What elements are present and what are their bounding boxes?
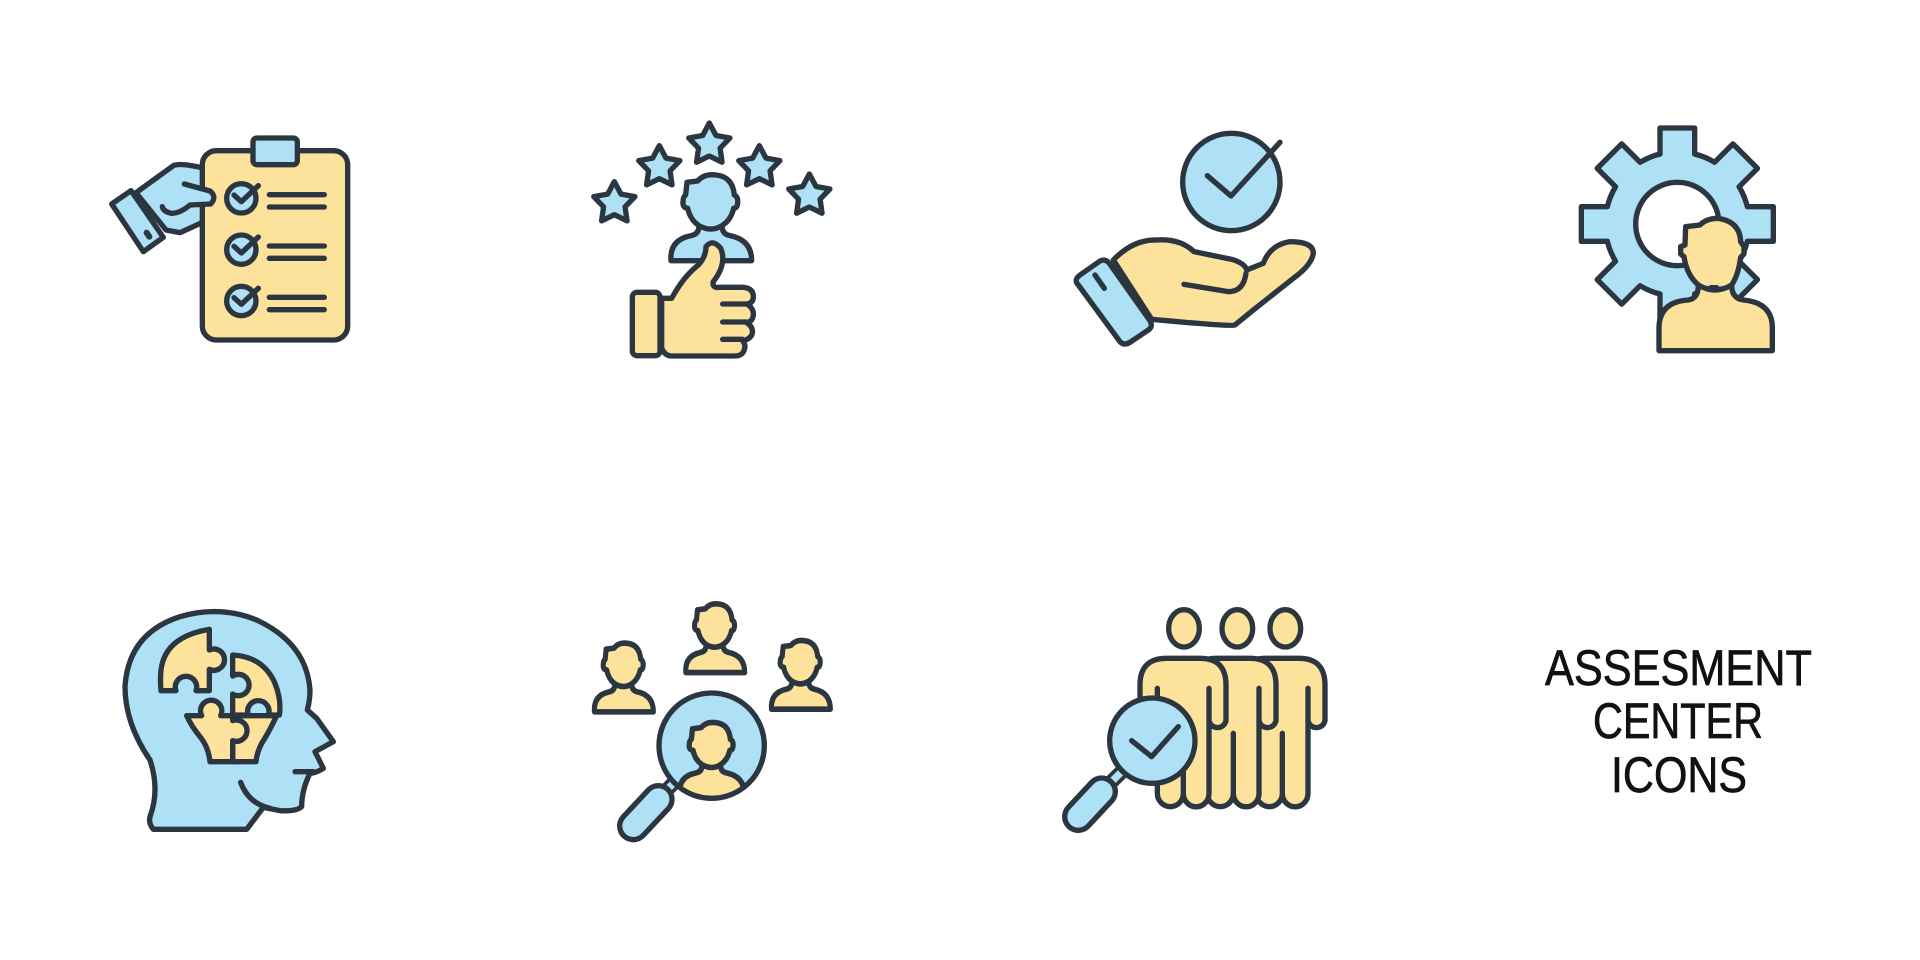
check mark bbox=[1132, 727, 1178, 757]
clipboard clip bbox=[253, 138, 297, 165]
person bbox=[1659, 218, 1772, 351]
magnifier lens bbox=[1110, 698, 1195, 783]
lens ring bbox=[659, 693, 764, 798]
clipboard board bbox=[202, 151, 348, 340]
check mark bbox=[1207, 142, 1280, 196]
cuff button bbox=[147, 233, 149, 237]
right figure bbox=[1239, 658, 1325, 807]
left figure bbox=[1140, 658, 1226, 807]
middle figure bbox=[1190, 658, 1276, 807]
cuff button bbox=[1095, 275, 1104, 288]
title line 2: CENTER bbox=[1593, 693, 1763, 749]
icon: open hand with check mark bbox=[1076, 133, 1313, 344]
icon: hand holding checklist clipboard bbox=[112, 138, 348, 340]
heads bbox=[1169, 610, 1301, 647]
title: assesment center icons bbox=[1545, 640, 1812, 803]
finger lines bbox=[723, 304, 747, 339]
person in lens bbox=[678, 720, 745, 796]
finger line bbox=[1184, 273, 1246, 292]
person bbox=[671, 175, 752, 261]
title line 1: ASSESMENT bbox=[1545, 640, 1812, 696]
head profile bbox=[125, 612, 333, 829]
icon: magnifier searching candidates bbox=[594, 604, 830, 826]
puzzle piece bottom left bbox=[187, 700, 247, 762]
magnifier handle bbox=[633, 799, 658, 826]
finger outline bbox=[162, 184, 214, 213]
icon: five stars, person and thumbs up bbox=[594, 123, 830, 356]
check item 3 bbox=[227, 286, 324, 316]
check circle bbox=[1183, 133, 1280, 231]
hand bbox=[136, 164, 204, 233]
title line 3: ICONS bbox=[1611, 747, 1747, 803]
check item 2 bbox=[227, 235, 324, 264]
gear bbox=[1581, 128, 1773, 320]
candidate top bbox=[686, 604, 745, 673]
candidate right bbox=[771, 640, 830, 709]
icon: head with puzzle pieces bbox=[125, 612, 333, 829]
jaw and mouth lines bbox=[241, 772, 313, 808]
pointing finger bbox=[198, 187, 215, 206]
icon: gear with person bbox=[1581, 128, 1773, 351]
icon: group of people with check magnifier bbox=[1078, 610, 1325, 817]
candidate left bbox=[594, 643, 653, 712]
hand cuff bbox=[1076, 260, 1151, 344]
magnifier neck bbox=[665, 781, 676, 792]
thumbs up hand bbox=[662, 243, 753, 356]
puzzle piece top right bbox=[233, 655, 280, 715]
check item 1 bbox=[227, 184, 324, 213]
open hand bbox=[1113, 240, 1313, 325]
magnifier handle bbox=[1078, 792, 1102, 817]
puzzle piece top left bbox=[160, 629, 225, 691]
shirt cuff bbox=[112, 191, 163, 252]
icon set canvas bbox=[109, 120, 1812, 842]
magnifier neck bbox=[1110, 771, 1123, 783]
puzzle piece bottom right bbox=[233, 716, 277, 762]
thumbs up cuff bbox=[632, 292, 660, 356]
magnifier lens bbox=[659, 693, 764, 798]
star rating bbox=[594, 123, 830, 221]
